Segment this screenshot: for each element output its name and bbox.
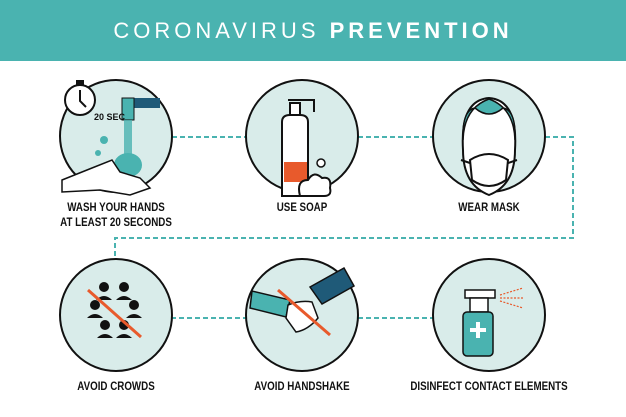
label: handshake: AVOID HANDSHAKE: [254, 381, 350, 393]
circle: handshake: [246, 259, 358, 371]
label: wash hands: [60, 202, 172, 229]
circle: soap: [246, 80, 358, 196]
title: CORONAVIRUS PREVENTION: [113, 18, 513, 43]
header banner: [0, 0, 626, 61]
circle: wash hands: 20 SEC: [94, 112, 126, 122]
circle: crowds: [60, 259, 172, 371]
connector path dashed: [115, 137, 573, 318]
circle: wash hands: [60, 80, 172, 195]
circle: disinfect: [433, 259, 545, 371]
label: wash hands: WASH YOUR HANDS: [67, 202, 165, 214]
label: crowds: AVOID CROWDS: [77, 381, 155, 393]
label: wash hands: AT LEAST 20 SECONDS: [60, 217, 172, 229]
label: soap: USE SOAP: [277, 202, 327, 214]
label: mask: WEAR MASK: [458, 202, 520, 214]
label: disinfect: DISINFECT CONTACT ELEMENTS: [410, 381, 568, 393]
circle: mask: [433, 80, 545, 195]
icon: stopwatch: [65, 80, 95, 115]
